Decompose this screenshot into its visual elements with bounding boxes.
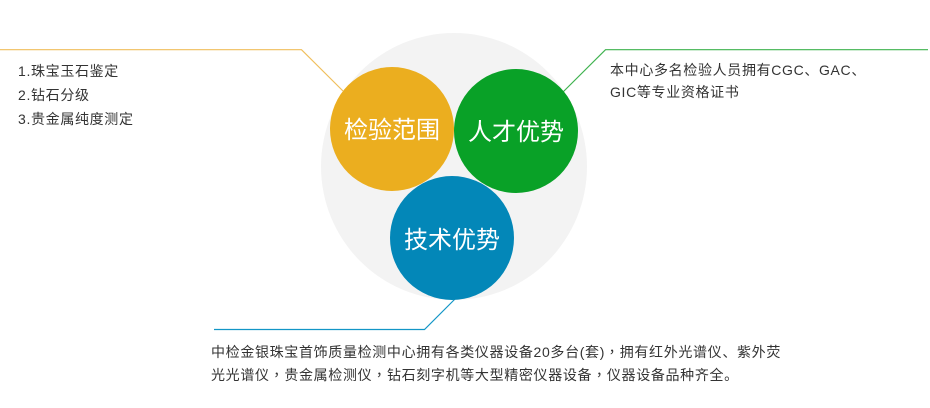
circle: technology advantage — [390, 176, 514, 300]
circle: technology advantage: 技术优势 — [404, 227, 500, 254]
text: talent description: 本中心多名检验人员拥有CGC、GAC、 — [610, 62, 866, 78]
circle: talent advantage: 人才优势 — [468, 119, 564, 146]
text: talent description: GIC等专业资格证书 — [610, 84, 740, 100]
circle: inspection scope — [330, 67, 454, 191]
text: inspection scope list — [18, 63, 134, 127]
text: technology description: 光光谱仪，贵金属检测仪，钻石刻字机等大型精密仪器设备，仪器设备品种齐全。 — [211, 365, 739, 385]
circle: inspection scope: 检验范围 — [344, 117, 440, 144]
circle: talent advantage — [454, 69, 578, 193]
text: inspection scope list: 3.贵金属纯度测定 — [18, 111, 134, 127]
text: inspection scope list: 1.珠宝玉石鉴定 — [18, 63, 119, 79]
text: technology description — [211, 342, 781, 385]
text: talent description — [610, 62, 866, 100]
text: inspection scope list: 2.钻石分级 — [18, 87, 90, 103]
text: technology description: 中检金银珠宝首饰质量检测中心拥有各类仪器设备20多台(套)，拥有红外光谱仪、紫外荧 — [211, 342, 781, 362]
background circle — [321, 33, 587, 300]
